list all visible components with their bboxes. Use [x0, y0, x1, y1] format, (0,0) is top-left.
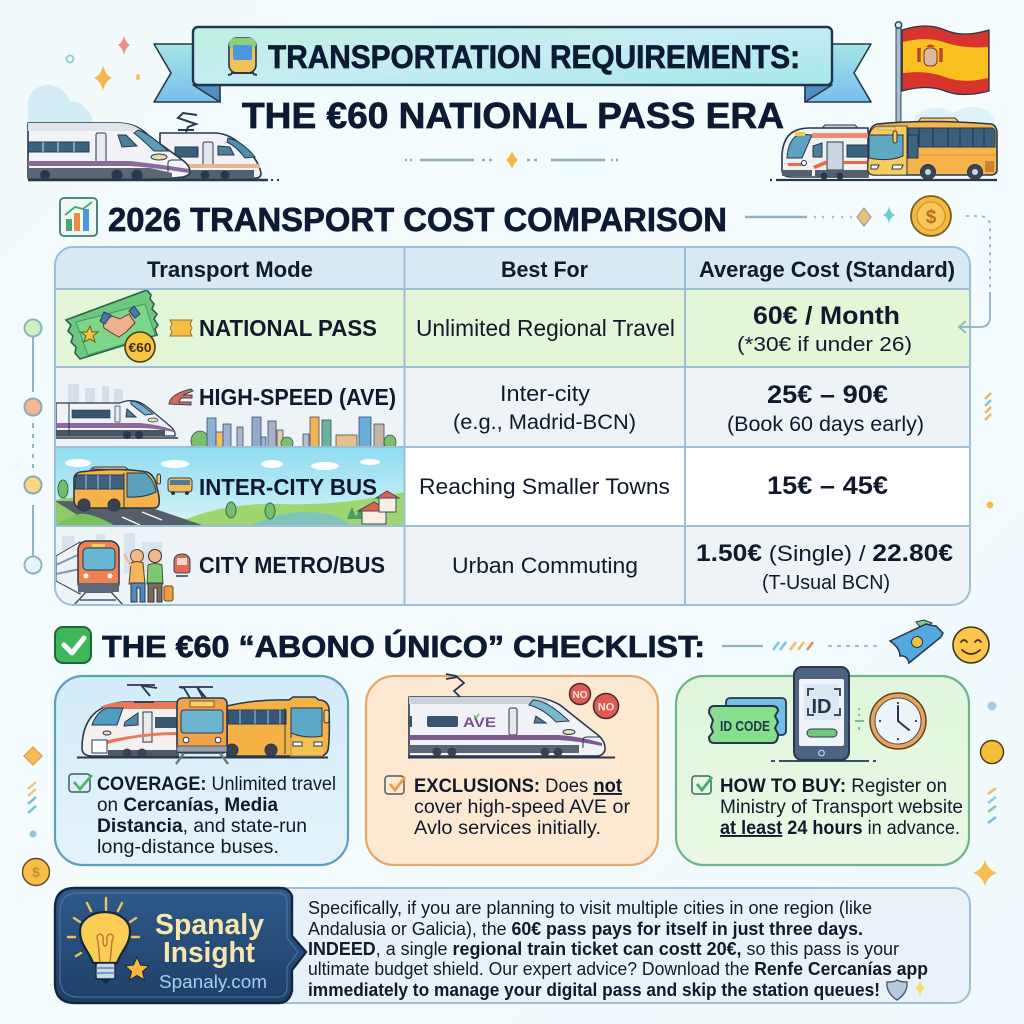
- panel: coverage: [55, 676, 348, 865]
- illustration: AVE train: [56, 401, 178, 439]
- best for: Urban Commuting: [452, 553, 638, 578]
- insight body text: immediately to manage your digital pass and skip the station queues!: [308, 980, 880, 1000]
- decorative connectors top right: [745, 196, 990, 333]
- insight title: Spanaly: [155, 909, 264, 941]
- header labels: Average Cost (Standard): [699, 257, 955, 282]
- icon: bar chart: [60, 198, 97, 236]
- header labels: Transport Mode: [147, 257, 313, 282]
- row: high-speed AVE: (Book 60 days early): [727, 413, 924, 436]
- panel: Spanaly insight: [55, 888, 970, 1003]
- icon: small gold ticket: [170, 320, 192, 336]
- icon: train: [228, 38, 257, 75]
- how to buy text: [720, 776, 963, 839]
- illustration: sky and countryside: [55, 447, 405, 526]
- coverage text: COVERAGE: Unlimited travel: [97, 774, 336, 795]
- icon: coin: $: [926, 207, 937, 228]
- illustration: colourful skyline: [191, 417, 396, 451]
- icon: green pass ticket: [66, 290, 158, 362]
- row: national pass: (*30€ if under 26): [737, 333, 912, 356]
- table header row: [55, 247, 970, 289]
- icon: no badges: [570, 684, 618, 718]
- table grid lines: [55, 247, 970, 605]
- insight body text: ultimate budget shield. Our expert advice? Download the Renfe Cercanías app: [308, 959, 928, 979]
- cost: 60€ / Month: [753, 302, 900, 330]
- icon: light bulb: [68, 898, 149, 984]
- coach bus: [868, 118, 997, 180]
- icon: checkbox: [69, 774, 92, 792]
- best for: Inter-city: [500, 381, 590, 406]
- icon: smiley: [953, 627, 989, 663]
- insight body text: Specifically, if you are planning to visit multiple cities in one region (like: [308, 898, 872, 918]
- icon: small metro: [174, 554, 190, 576]
- left lower decorations: [22, 747, 50, 886]
- cost: 25€ – 90€: [767, 381, 888, 409]
- best for: Reaching Smaller Towns: [419, 474, 670, 499]
- label: HIGH-SPEED (AVE): [199, 384, 396, 410]
- cost: 15€ – 45€: [767, 472, 888, 500]
- label: INTER-CITY BUS: [199, 474, 377, 500]
- cost: 1.50€ (Single) / 22.80€: [696, 540, 953, 567]
- icon: no badges: NO: [572, 690, 588, 701]
- illustration: travellers: [124, 550, 173, 602]
- illustration: high-speed trains header left: [28, 113, 279, 180]
- icon: blue ticket: [890, 620, 943, 663]
- icon: small bullet train: [169, 389, 193, 405]
- decorations beside checklist heading: [722, 620, 989, 663]
- title line two: THE €60 NATIONAL PASS ERA: [242, 95, 784, 136]
- label: CITY METRO/BUS: [199, 552, 385, 578]
- icon: shield and sparkle: [887, 979, 925, 1000]
- row: city metro and bus: (T-Usual BCN): [762, 571, 890, 594]
- decorative sparkles top left: [28, 36, 140, 125]
- icon: clock: [870, 693, 926, 749]
- illustration: pale city: [62, 533, 162, 573]
- illustration: AVE train: [408, 674, 615, 758]
- how to buy text: at least 24 hours in advance.: [720, 818, 960, 839]
- regional train: [782, 125, 868, 180]
- timeline left of table: [24, 320, 42, 574]
- illustration: house: [358, 491, 399, 524]
- coverage text: Distancia, and state-run: [97, 816, 307, 837]
- front train: [28, 123, 190, 180]
- panel: how to buy: [676, 667, 969, 865]
- illustration: skyline pale: [68, 384, 123, 414]
- header labels: [147, 257, 955, 282]
- label: NATIONAL PASS: [199, 315, 377, 341]
- exclusions text: Avlo services initially.: [414, 818, 601, 839]
- section heading: cost comparison: [60, 198, 727, 238]
- coverage text: on Cercanías, Media: [97, 795, 278, 816]
- checklist heading text: THE €60 “ABONO ÚNICO” CHECKLIST:: [102, 628, 705, 664]
- illustration: AVE train: AVE: [463, 714, 496, 730]
- right lower decorations: [973, 702, 1004, 886]
- website: Spanaly.com: [159, 972, 267, 992]
- how to buy text: Ministry of Transport website: [720, 797, 963, 818]
- coat of arms: [919, 44, 941, 66]
- illustration: coach bus: [74, 467, 160, 511]
- icon: id code ticket: ID CODE: [720, 718, 770, 735]
- icon: phone: [794, 667, 849, 760]
- coverage text: long-distance buses.: [97, 837, 279, 858]
- exclusions text: cover high-speed AVE or: [414, 797, 631, 818]
- icon: blue ticket behind: [726, 698, 786, 735]
- illustration: train tram and bus: [77, 685, 329, 764]
- icon: small bus: [168, 478, 192, 495]
- ribbon banner: [154, 27, 871, 102]
- exclusions text: [414, 776, 631, 839]
- section heading: checklist: [55, 627, 705, 664]
- comparison table: [55, 247, 970, 605]
- how to buy text: HOW TO BUY: Register on: [720, 776, 947, 797]
- right side decorations: [985, 393, 994, 508]
- icon: checkbox: [692, 776, 712, 794]
- insight badge: [55, 888, 306, 1003]
- icon: coin: [911, 196, 951, 236]
- icon: checkbox: [385, 776, 405, 794]
- row: inter-city bus: [55, 447, 970, 526]
- insight body text: INDEED, a single regional train ticket can costt 20€, so this pass is your: [308, 939, 899, 959]
- row: city metro and bus: [55, 526, 970, 605]
- icon: green check: [55, 627, 91, 663]
- icon: flag of Spain: [895, 22, 989, 122]
- icon: id code ticket: [709, 706, 778, 743]
- table frame: [55, 247, 970, 605]
- insight body text: [308, 898, 928, 1000]
- panel: exclusions: [366, 674, 658, 865]
- title line one: TRANSPORTATION REQUIREMENTS:: [268, 39, 800, 75]
- header labels: Best For: [501, 257, 588, 282]
- exclusions text: EXCLUSIONS: Does not: [414, 776, 623, 797]
- arrow into table: [959, 292, 990, 333]
- connector: [771, 708, 876, 761]
- row: high-speed AVE: (e.g., Madrid-BCN): [453, 410, 636, 434]
- icon: green pass ticket: €60: [128, 341, 152, 355]
- left lower decorations: $: [32, 864, 40, 880]
- insight body text: Andalusia or Galicia), the 60€ pass pays for itself in just three days.: [308, 919, 863, 939]
- coverage text: [97, 774, 336, 858]
- comparison heading text: 2026 TRANSPORT COST COMPARISON: [108, 201, 727, 238]
- icon: no badges: NO: [598, 702, 615, 714]
- rear train: [160, 113, 261, 180]
- row: national pass: [55, 289, 970, 367]
- best for: Unlimited Regional Travel: [416, 315, 675, 341]
- title divider: [405, 151, 618, 169]
- illustration: metro train: [56, 541, 123, 605]
- insight badge: Insight: [163, 937, 255, 969]
- illustration: train and bus header right: [770, 107, 997, 180]
- row: high-speed AVE: [55, 367, 970, 451]
- icon: phone: ID: [812, 696, 832, 718]
